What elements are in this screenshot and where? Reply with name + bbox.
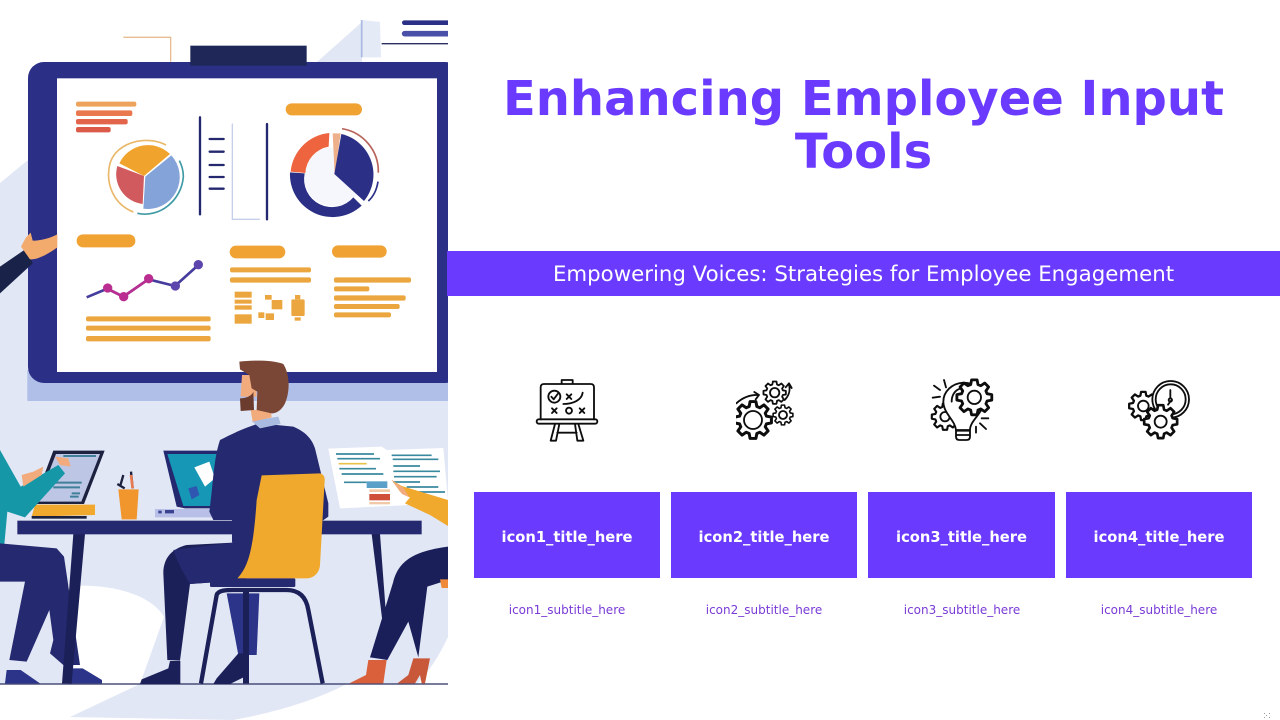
banner subtitle: Empowering Voices: Strategies for Employee Engagement bbox=[553, 262, 1174, 287]
card 4 title: icon4_title_here bbox=[1094, 529, 1224, 546]
icon: gears with clock bbox=[1128, 380, 1190, 440]
card 4 title bbox=[1066, 492, 1252, 578]
table legs bbox=[62, 534, 387, 683]
center laptop bbox=[155, 451, 237, 517]
card 4 subtitle: icon4_subtitle_here bbox=[1101, 603, 1217, 617]
legend bars bbox=[76, 102, 136, 132]
chair bbox=[201, 473, 325, 683]
title bbox=[503, 71, 1224, 180]
board accents: lines and pinned paper bbox=[123, 20, 448, 62]
illustration: team reviewing dashboard bbox=[0, 20, 448, 720]
card 3 subtitle: icon3_subtitle_here bbox=[904, 603, 1020, 617]
card 2 subtitle: icon2_subtitle_here bbox=[706, 603, 822, 617]
pill heading: right bbox=[332, 245, 387, 258]
pill heading: middle bbox=[230, 246, 285, 258]
seated man bbox=[140, 361, 328, 684]
board clip bbox=[190, 46, 307, 66]
card 3 title: icon3_title_here bbox=[896, 529, 1027, 546]
card 1 title: icon1_title_here bbox=[502, 529, 632, 546]
background shapes bbox=[0, 22, 448, 720]
presenter arm bbox=[0, 233, 57, 293]
floor line bbox=[0, 682, 448, 686]
trend text bars bbox=[86, 316, 211, 341]
card 1 title bbox=[474, 492, 660, 578]
left person laptop bbox=[32, 451, 105, 519]
card 1 subtitle: icon1_subtitle_here bbox=[509, 603, 625, 617]
pill heading: trend bbox=[77, 234, 135, 247]
pie chart bbox=[109, 140, 183, 214]
left person bbox=[0, 450, 102, 683]
banner subtitle bbox=[447, 251, 1280, 296]
card 2 title bbox=[671, 492, 857, 578]
board screen bbox=[57, 78, 437, 372]
pencil cup bbox=[117, 472, 139, 519]
list column bbox=[200, 117, 267, 219]
board frame bbox=[28, 62, 461, 383]
title: Enhancing Employee Input bbox=[503, 71, 1224, 127]
board shadow bbox=[27, 370, 448, 401]
icon: lightbulb with gears bbox=[930, 378, 994, 441]
papers bbox=[328, 447, 448, 508]
right person bbox=[349, 480, 448, 683]
corner watermark mark bbox=[1264, 713, 1270, 718]
icon: gears with arrows bbox=[736, 380, 794, 440]
line chart bbox=[87, 260, 203, 301]
title: Tools bbox=[795, 124, 932, 180]
icon: strategy board bbox=[536, 379, 598, 442]
pill heading: donut bbox=[286, 103, 362, 115]
card 3 title bbox=[868, 492, 1055, 578]
card 2 title: icon2_title_here bbox=[699, 529, 829, 546]
middle text bars and mini charts bbox=[230, 267, 311, 324]
table top bbox=[17, 521, 422, 534]
donut chart bbox=[290, 129, 378, 217]
right text bars bbox=[334, 277, 411, 317]
